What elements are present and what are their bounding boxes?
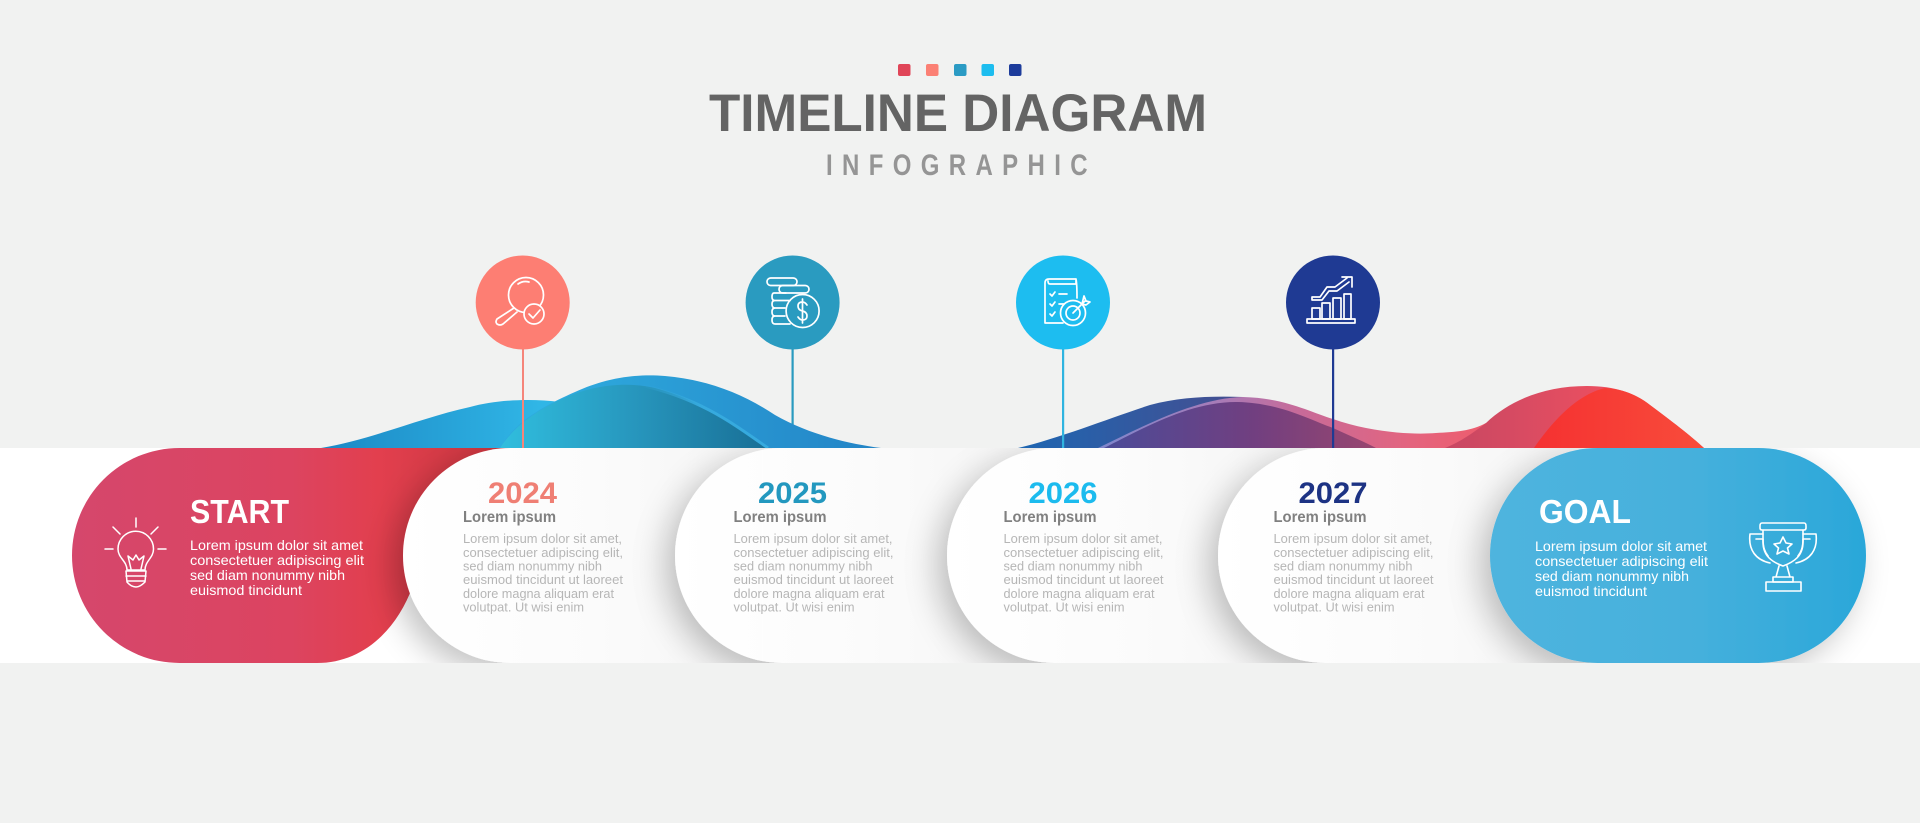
panel: 2024 (463, 477, 623, 614)
goal body: euismod tincidunt (1535, 583, 1647, 599)
white band (0, 448, 1920, 663)
body 2027: consectetuer adipiscing elit, (1274, 545, 1434, 560)
body 2027: dolore magna aliquam erat (1274, 586, 1425, 601)
body 2024: sed diam nonummy nibh (463, 558, 602, 574)
panel: 2026 (1004, 477, 1164, 614)
circle icon: growth chart (1286, 256, 1380, 350)
start body: euismod tincidunt (190, 582, 302, 598)
body 2025: dolore magna aliquam erat (734, 586, 885, 601)
pole 2024 (522, 349, 524, 448)
body 2025: consectetuer adipiscing elit, (734, 545, 894, 560)
body 2025: sed diam nonummy nibh (734, 558, 872, 574)
body 2024: Lorem ipsum dolor sit amet, (463, 531, 622, 546)
body 2026: euismod tincidunt ut laoreet (1004, 572, 1164, 587)
body 2027: Lorem ipsum dolor sit amet, (1274, 531, 1432, 546)
year 2027: 2027 (1298, 477, 1368, 510)
goal body: sed diam nonummy nibh (1535, 568, 1689, 584)
goal body (1535, 538, 1708, 599)
body 2025 (734, 531, 894, 614)
body 2024: euismod tincidunt ut laoreet (463, 572, 623, 587)
body 2026: dolore magna aliquam erat (1004, 586, 1155, 601)
start body: Lorem ipsum dolor sit amet (190, 537, 363, 553)
body 2024: dolore magna aliquam erat (463, 586, 614, 601)
body 2027 (1274, 531, 1434, 614)
icon: light bulb (105, 518, 166, 587)
body 2026: Lorem ipsum dolor sit amet, (1004, 531, 1162, 546)
year 2026: 2026 (1028, 477, 1098, 510)
start body (190, 537, 364, 598)
heading 2026: Lorem ipsum (1004, 509, 1096, 526)
pole 2025 (792, 349, 794, 448)
white pill shapes (403, 448, 1866, 663)
body 2024: volutpat. Ut wisi enim (463, 600, 584, 614)
goal body: Lorem ipsum dolor sit amet (1535, 538, 1707, 554)
body 2026 (1004, 531, 1164, 614)
body 2027: euismod tincidunt ut laoreet (1274, 572, 1434, 587)
goal body: consectetuer adipiscing elit (1535, 553, 1708, 569)
panel: goal text (1535, 493, 1708, 599)
pole 2027 (1332, 349, 1334, 448)
icon: trophy (1750, 523, 1816, 591)
body 2027: sed diam nonummy nibh (1274, 558, 1412, 574)
start heading: START (190, 493, 289, 530)
goal heading: GOAL (1539, 493, 1631, 530)
start body: consectetuer adipiscing elit (190, 552, 364, 568)
body 2026: consectetuer adipiscing elit, (1004, 545, 1164, 560)
body 2024: consectetuer adipiscing elit, (463, 545, 623, 560)
panel: start text (190, 493, 364, 598)
pole 2026 (1062, 349, 1064, 448)
waves: blue hills (321, 375, 881, 448)
start pill (72, 448, 520, 663)
body 2025: Lorem ipsum dolor sit amet, (734, 531, 892, 546)
heading 2027: Lorem ipsum (1274, 509, 1366, 526)
body 2026: volutpat. Ut wisi enim (1004, 600, 1124, 614)
panel: 2027 (1274, 477, 1434, 614)
start body: sed diam nonummy nibh (190, 567, 345, 583)
body 2026: sed diam nonummy nibh (1004, 558, 1142, 574)
title: TIMELINE DIAGRAM (709, 84, 1207, 143)
colour dots (898, 64, 1022, 76)
year 2025: 2025 (758, 477, 827, 510)
circle icon: checklist and target (1016, 256, 1110, 350)
heading 2024: Lorem ipsum (463, 509, 556, 526)
body 2025: volutpat. Ut wisi enim (734, 600, 854, 614)
body 2024 (463, 531, 623, 614)
circle icon: magnifier (476, 256, 570, 350)
body 2027: volutpat. Ut wisi enim (1274, 600, 1394, 614)
body 2025: euismod tincidunt ut laoreet (734, 572, 894, 587)
heading 2025: Lorem ipsum (734, 509, 826, 526)
waves: purple and red hills (1018, 386, 1704, 448)
circle icon: coins (746, 256, 840, 350)
panel: 2025 (734, 477, 894, 614)
year 2024: 2024 (488, 477, 557, 510)
subtitle: INFOGRAPHIC (826, 147, 1088, 182)
